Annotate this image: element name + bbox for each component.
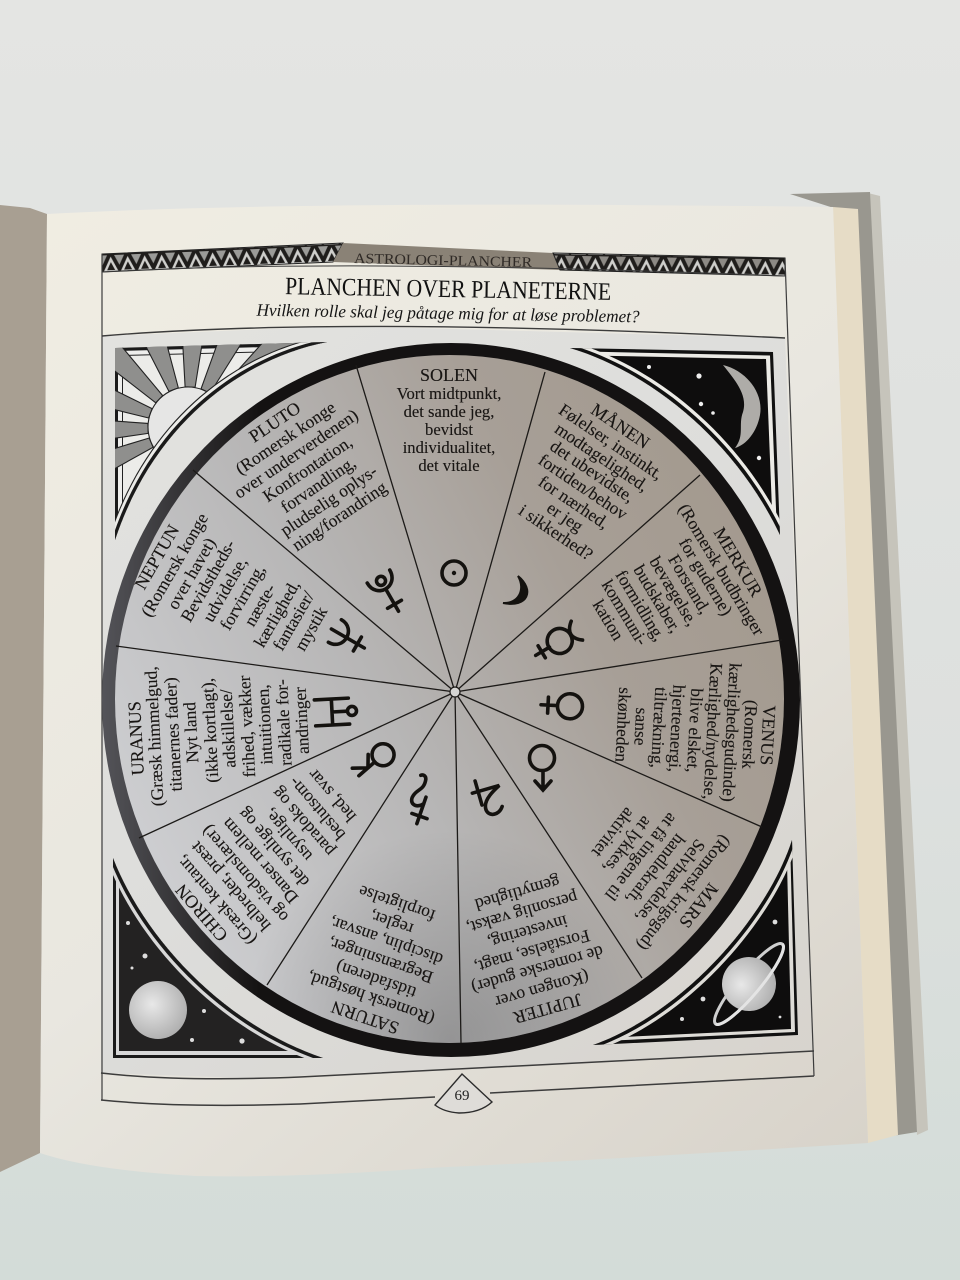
sector: Chiron: usynlige, [259, 805, 316, 866]
sector: Neptun: fantasier/ [268, 587, 318, 654]
header pattern strip: left [102, 243, 343, 272]
sector: Merkur: Forstand, [664, 551, 715, 617]
sector: Venus: kærlighedsgudinde) [718, 662, 746, 803]
sector: Mars [560, 774, 750, 967]
sector: Neptun: kærlighed, [249, 576, 304, 651]
sector: Solen: det vitale [418, 456, 480, 475]
corner: sun [115, 342, 327, 540]
sector: Jupiter: Forståelse, magt, [472, 926, 592, 978]
sector: Saturn: (Romersk høstgud, [304, 967, 437, 1030]
sector: Chiron: det synlige og [233, 804, 313, 891]
sector: Uranus: frihed, vækker [234, 675, 259, 778]
page number tag: 69 [454, 1088, 470, 1104]
sector: Uranus: andringer [290, 686, 313, 755]
sector: Chiron: hed, svar [303, 765, 360, 826]
sector: Chiron: helbreder, præst [186, 838, 275, 935]
cover shadow [868, 193, 928, 1135]
title: PLANCHEN OVER PLANETERNE [285, 273, 611, 306]
sector: Solen [397, 365, 501, 475]
sector: Jupiter [448, 866, 617, 1037]
sector: Pluto: PLUTO [245, 398, 304, 446]
sector: Solen: SOLEN [420, 365, 478, 385]
page number tag [435, 1074, 492, 1113]
icon: sun symbol [442, 561, 466, 585]
sector: Jupiter: personlig vækst, [464, 888, 580, 938]
sector: Neptun: (Romersk konge [137, 509, 212, 620]
sector: Saturn: regler, [367, 906, 416, 940]
sector: Uranus: intuitionen, [252, 684, 277, 765]
sector: Chiron: CHIRON [171, 880, 232, 946]
sector: Venus: (Romersk [738, 699, 762, 770]
header pattern strip: right [553, 253, 785, 276]
sector: Solen: individualitet, [403, 438, 495, 457]
sector: Neptun: mystik [290, 603, 331, 654]
sector: Chiron: og visdomslærer) [197, 821, 292, 927]
sector: Mars: MARS [675, 879, 722, 932]
sector: Venus [610, 657, 782, 804]
planet wheel [102, 343, 800, 1057]
sector: Mars: (Romersk krigsgud) [633, 832, 735, 955]
sun disc [148, 386, 206, 454]
sector: Uranus: radikale for- [271, 679, 296, 766]
sector: Uranus: adskillelse/ [216, 689, 240, 768]
planet symbols [314, 561, 583, 826]
sector: Uranus: Nyt land [179, 701, 202, 763]
inner framed panel background [101, 326, 814, 1078]
sector: Pluto: pludselig oplys- [276, 460, 381, 540]
wheel disc [115, 355, 784, 1043]
sector: Månen: modtagelighed, [551, 418, 652, 496]
sector: Merkur: bevægelse, [646, 553, 702, 629]
icon: pluto symbol [367, 570, 410, 618]
sector: Chiron: Danser mellem [217, 814, 302, 908]
sector: Månen: er jeg [543, 497, 587, 536]
icon: jupiter symbol [469, 775, 507, 818]
sector: Månen: Følelser, instinkt, [555, 399, 667, 484]
sector: Jupiter: de romerske guder) [469, 942, 606, 998]
sector: Merkur: kommuni- [598, 576, 652, 649]
sector: Neptun: NEPTUN [130, 521, 183, 593]
sector: Mars: at lykkes, [599, 813, 656, 878]
sector: Venus: sanse [630, 707, 652, 746]
corner: saturn and stars [593, 840, 798, 1045]
planet [129, 981, 187, 1039]
sector: Pluto: (Romersk konge [232, 397, 339, 479]
sector: Uranus: titanernes fader) [160, 677, 186, 792]
sector: Jupiter: gemytlighed [473, 872, 563, 915]
sector: Chiron: paradoks og [267, 783, 338, 861]
sector: Månen: MÅNEN [587, 399, 653, 453]
sector: Saturn: forpligtelse [356, 881, 438, 926]
icon: venus symbol [540, 692, 583, 719]
stars [680, 920, 781, 1021]
sector: Mars: at få tingene til [601, 809, 682, 905]
sector: Solen: det sande jeg, [404, 402, 494, 421]
header centre label [333, 243, 560, 271]
sector: Neptun [120, 500, 342, 695]
sector: Jupiter: (Kongen over [493, 967, 591, 1013]
sector: Chiron: (Græsk kentaur, [172, 852, 260, 949]
sector: Månen [496, 384, 677, 572]
icon: saturn symbol [405, 774, 440, 826]
sector: Uranus: (Græsk himmelgud, [140, 666, 168, 807]
sector: Jupiter: JUPITER [511, 990, 584, 1028]
stars [647, 365, 761, 460]
stars [126, 921, 245, 1044]
sector: Pluto: over underverdenen) [230, 405, 362, 502]
sector: Venus: VENUS [756, 705, 780, 766]
sector: Neptun: næste- [240, 580, 280, 630]
icon: chiron symbol [352, 739, 399, 784]
sector: Merkur: formidling, [612, 566, 670, 644]
hub [450, 687, 460, 697]
sector: Uranus: URANUS [124, 701, 148, 776]
sector: Chiron: beslutsom- [284, 773, 349, 845]
sector: Månen: det ubevidste, [546, 436, 638, 507]
sector: Merkur: (Romersk budbringer [674, 500, 769, 639]
sector: Saturn: tidsfaderen) [333, 957, 419, 1003]
icon: uranus symbol [314, 698, 357, 726]
sector: Uranus: (ikke kortlagt), [197, 678, 222, 783]
header band [102, 243, 785, 276]
corner: moon and stars [570, 348, 780, 535]
sector: Merkur: MERKUR [710, 524, 767, 600]
sector: Merkur: kation [589, 596, 628, 644]
sector: Pluto: Konfrontation, [259, 431, 356, 506]
sector: Månen: fortiden/behov [535, 449, 632, 524]
sector: Saturn [298, 875, 469, 1048]
corner: planet and stars [113, 858, 323, 1058]
sector: Mars: aktivitet [588, 804, 639, 862]
sector: Venus: blive elsket, [683, 688, 707, 773]
header centre label: ASTROLOGI-PLANCHER [354, 251, 533, 271]
icon: neptune symbol [325, 618, 371, 659]
sun rays [115, 342, 297, 468]
stacked page edges [833, 207, 898, 1143]
sector: Chiron [153, 745, 380, 965]
sector spokes [116, 365, 782, 1043]
sector: Saturn: SATURN [329, 997, 401, 1039]
sector: Merkur: budskaber, [630, 561, 686, 636]
sector: Solen: bevidst [425, 420, 473, 439]
sector: Venus: skønheden [611, 687, 635, 763]
wheel disc shading [115, 355, 784, 1043]
sector: Venus: Kærlighed/nydelse, [700, 663, 727, 800]
icon: mars symbol [530, 746, 554, 790]
icon: mercury symbol [529, 620, 583, 666]
sector: Jupiter: investering, [486, 911, 570, 953]
sector: Pluto [209, 373, 404, 565]
sector: Neptun: Bevidstheds- [176, 536, 239, 625]
sector: Pluto: ning/forandring [288, 477, 391, 555]
sector: Mars: handlekraft, [622, 830, 690, 909]
icon: moon symbol [503, 576, 527, 604]
right page [40, 205, 868, 1176]
sector: Merkur [569, 491, 784, 702]
ringed planet [713, 942, 785, 1026]
sector: Saturn: Begrænsninger, [325, 933, 436, 988]
sector: Merkur: for guderne) [675, 534, 737, 619]
sector: Uranus [122, 658, 315, 808]
sector: Saturn: disciplin, ansvar, [327, 913, 445, 970]
frame lines [101, 254, 814, 1105]
moon [723, 365, 761, 448]
left page of book [0, 205, 47, 1172]
sector: Neptun: over havet) [163, 534, 220, 613]
sector: Neptun: forvirring, [215, 561, 269, 633]
sector: Neptun: udvidelse, [198, 553, 251, 625]
sector: Venus: tiltrækning, [647, 687, 671, 769]
sector: Pluto: forvandling, [277, 452, 359, 517]
book cover edge [790, 192, 917, 1138]
sector: Månen: i sikkerhed? [515, 500, 597, 564]
sector: Mars: Selvhævdelse, [632, 836, 710, 927]
sector: Månen: for nærhed, [535, 471, 613, 533]
subtitle: Hvilken rolle skal jeg påtage mig for at løse problemet? [255, 300, 640, 326]
wheel outer ring [102, 343, 800, 1057]
sector: Venus: hjerteenergi, [665, 684, 690, 773]
sector: Solen: Vort midtpunkt, [397, 384, 501, 403]
